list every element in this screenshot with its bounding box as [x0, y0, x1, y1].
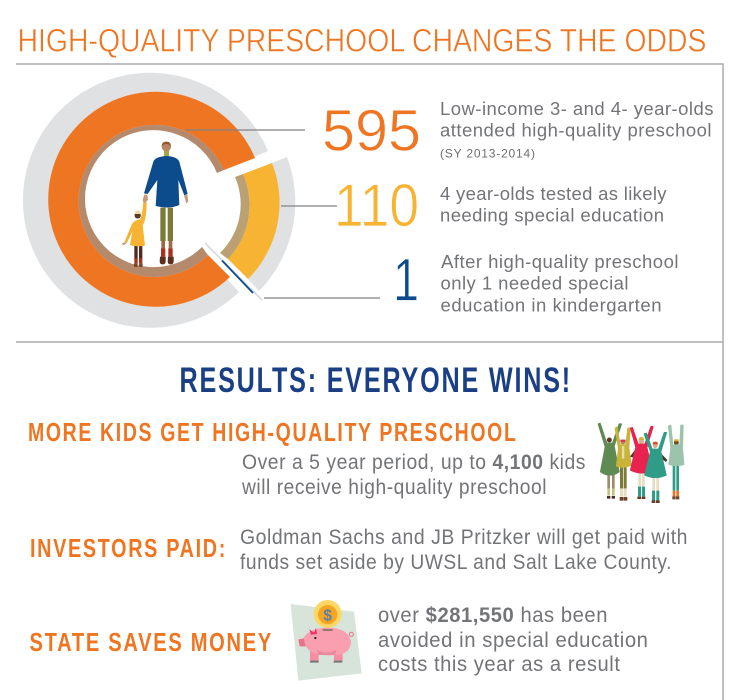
text: 1 description: only 1 needed special: [440, 273, 628, 294]
text: investors description: funds set aside by UWSL and Salt Lake County.: [240, 550, 672, 574]
stat: 595: 595: [322, 98, 421, 164]
pig: [298, 628, 353, 663]
donut: gray ring, yellow segment: [248, 157, 295, 291]
text: investors description: [240, 525, 688, 574]
donut: tan inner ring: [220, 174, 250, 259]
text: state savings description: [378, 603, 648, 676]
donut: outer gray ring, main segment: [23, 73, 268, 328]
icon: piggy bank with coin: [291, 600, 362, 681]
text: 595 description: Low-income 3- and 4- year-olds: [440, 98, 714, 119]
leader line 110: [281, 205, 337, 207]
child: teal dress: [644, 433, 667, 503]
leader line 595: [185, 129, 305, 131]
heading: state saves money: STATE SAVES MONEY: [30, 627, 273, 657]
text: 595 description: [440, 98, 714, 160]
icon: adult and child holding hands: [121, 142, 188, 267]
child: [121, 198, 147, 267]
stat: 110: 110: [334, 172, 419, 239]
text: 110 description: [440, 183, 667, 226]
donut: white center: [84, 130, 222, 268]
adult: [143, 142, 188, 264]
icon: children cheering: [598, 423, 684, 503]
heading: more kids: MORE KIDS GET HIGH-QUALITY PRESCHOOL: [28, 417, 518, 447]
child: red dress: [630, 427, 653, 499]
heading: results: RESULTS: EVERYONE WINS!: [180, 361, 572, 400]
text: 1 description: After high-quality preschool: [441, 251, 678, 272]
text: 595 description: attended high-quality preschool: [440, 120, 712, 141]
text: more kids description: will receive high-quality preschool: [241, 475, 547, 499]
child: sage dress: [669, 425, 684, 499]
text: 110 description: 4 year-olds tested as likely: [440, 183, 667, 204]
child: green dress: [598, 423, 621, 499]
paper background: [291, 604, 362, 681]
text: state savings description: over $281,550 has been: [378, 603, 608, 627]
donut: blue sliver segment 1: [205, 243, 262, 300]
text: state savings description: costs this year as a result: [378, 652, 620, 676]
text: state savings description: avoided in special education: [378, 628, 648, 652]
text: more kids description: [241, 450, 586, 499]
text: 1 description: [440, 251, 678, 316]
text: investors description: Goldman Sachs and JB Pritzker will get paid with: [240, 525, 688, 549]
text: 595 description: (SY 2013-2014): [440, 146, 535, 160]
donut chart: [23, 73, 295, 328]
child: mustard dress: [615, 427, 631, 501]
stat: 1: 1: [393, 246, 419, 314]
donut: orange segment 595: [48, 92, 255, 307]
leader line 1: [264, 297, 380, 299]
text: 110 description: needing special education: [440, 205, 664, 226]
donut: yellow segment 110: [228, 163, 280, 279]
donut: brown inner ring: [79, 125, 224, 277]
text: more kids description: Over a 5 year period, up to 4,100 kids: [242, 450, 586, 474]
heading: investors paid: INVESTORS PAID:: [30, 533, 227, 563]
text: 1 description: education in kindergarten: [440, 295, 662, 316]
coin: $: [323, 607, 332, 624]
